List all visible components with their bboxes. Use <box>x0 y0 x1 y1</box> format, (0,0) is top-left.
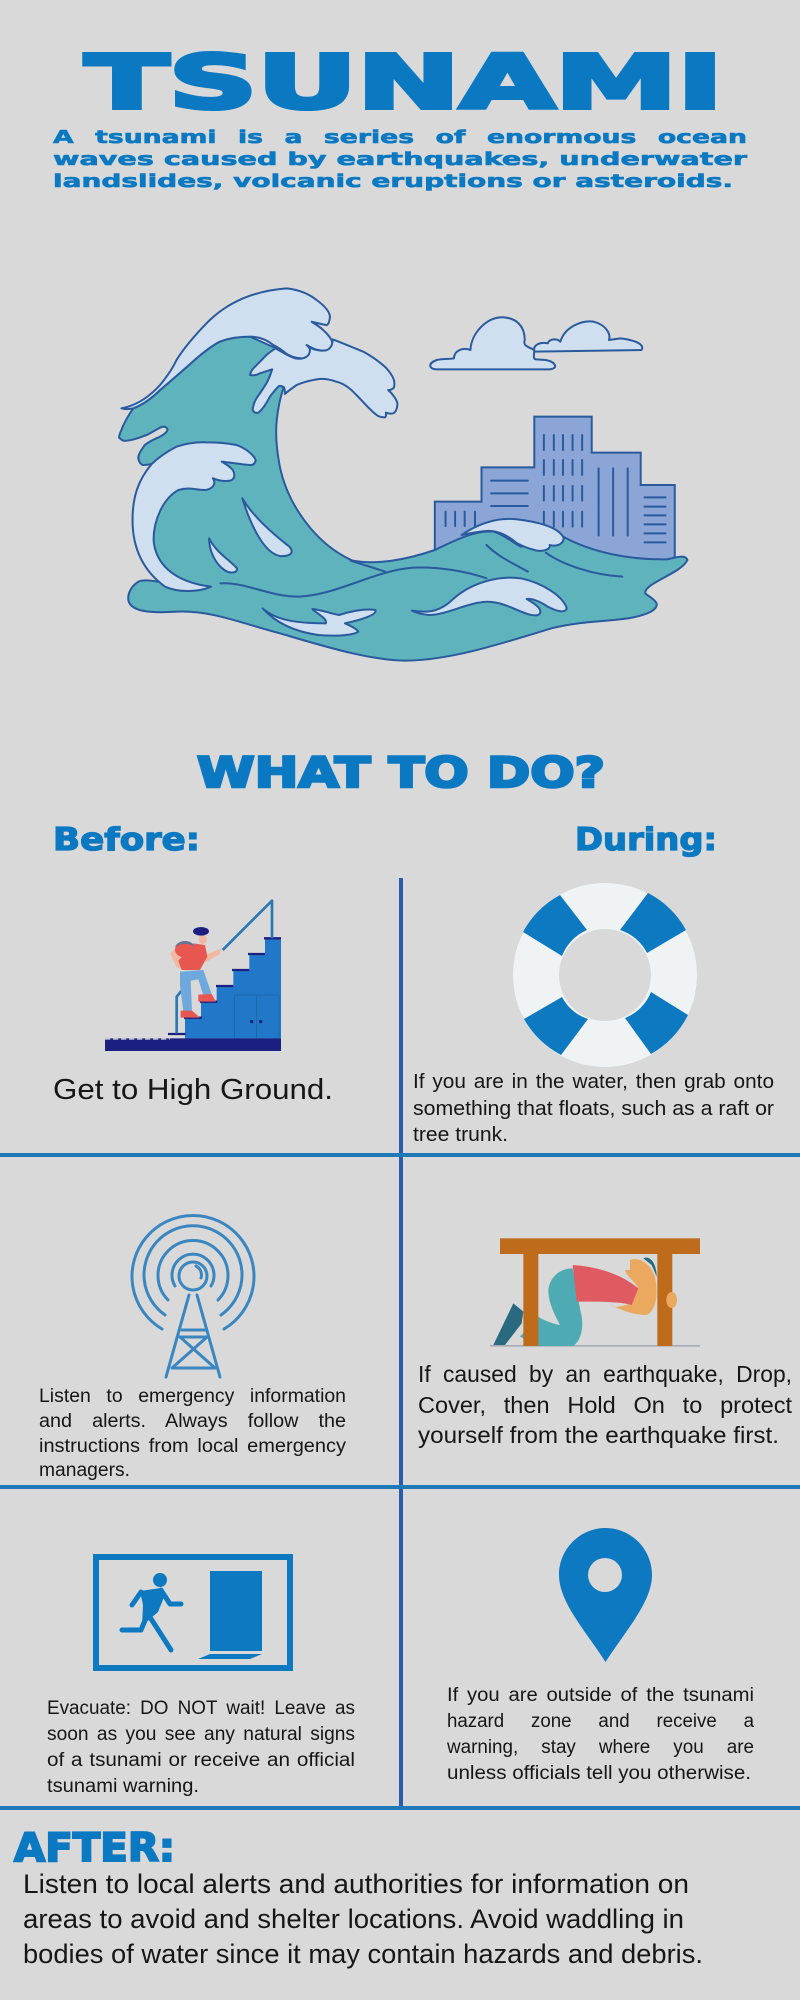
icon: exit sign <box>96 1557 290 1668</box>
text: water advice <box>413 1071 774 1146</box>
illustration: tsunami wave, city and clouds <box>119 288 687 661</box>
text: hazard zone advice: If you are outside of the tsunami <box>447 1685 754 1706</box>
text: after advice: Listen to local alerts and authorities for information on <box>23 1869 689 1899</box>
horizontal divider 1 <box>0 1153 800 1157</box>
building windows <box>446 435 666 542</box>
heading: what to do: WHAT TO DO? <box>197 748 605 797</box>
water lines <box>221 545 622 597</box>
text: hazard zone advice: unless officials tell you otherwise. <box>447 1763 751 1784</box>
text: earthquake advice: yourself from the earthquake first. <box>418 1422 779 1448</box>
text: get to high ground: Get to High Ground. <box>53 1074 333 1106</box>
text: evacuate: of a tsunami or receive an official <box>47 1750 355 1771</box>
text: evacuate <box>47 1698 355 1797</box>
text: after advice: bodies of water since it may contain hazards and debris. <box>23 1939 703 1969</box>
cloud back <box>534 321 642 352</box>
text: emergency information: Listen to emergency information <box>39 1386 346 1407</box>
city buildings <box>435 417 675 563</box>
text: after advice: areas to avoid and shelter locations. Avoid waddling in <box>23 1904 684 1934</box>
text: water advice: tree trunk. <box>413 1124 508 1146</box>
icon: location pin <box>559 1528 652 1662</box>
text: emergency information: and alerts. Always follow the <box>39 1411 346 1432</box>
text: evacuate: soon as you see any natural signs <box>47 1724 355 1745</box>
heading: during: During: <box>575 822 717 858</box>
right foreground foam <box>412 578 567 615</box>
intro text block <box>53 128 748 192</box>
text: water advice: something that floats, such as a raft or <box>413 1098 774 1120</box>
cloud front <box>430 317 555 369</box>
title: TSUNAMI <box>85 40 723 126</box>
foam droplets <box>209 498 292 573</box>
panel: during, hold onto floating object <box>413 883 774 1146</box>
panel: during, drop cover hold on <box>418 1238 793 1448</box>
text: earthquake advice: If caused by an earthquake, Drop, <box>418 1361 792 1387</box>
icon: person under table <box>490 1238 700 1347</box>
icon: life ring <box>513 883 697 1067</box>
text: emergency information: managers. <box>39 1460 130 1481</box>
text: hazard zone advice <box>446 1685 754 1784</box>
panel: before, evacuate <box>47 1557 355 1797</box>
heading: after: AFTER: <box>14 1826 175 1871</box>
text: after advice <box>23 1869 703 1969</box>
heading: before: Before: <box>53 822 200 858</box>
icon: radio tower <box>132 1215 254 1377</box>
text: water advice: If you are in the water, then grab onto <box>413 1071 774 1093</box>
intro text block: waves caused by earthquakes, underwater <box>53 150 748 170</box>
panel: during, stay outside hazard zone <box>446 1528 754 1784</box>
text: earthquake advice: Cover, then Hold On to protect <box>418 1392 793 1418</box>
icon: person climbing stairs <box>105 901 281 1051</box>
text: emergency information <box>39 1386 347 1481</box>
forward foam crest <box>250 339 397 417</box>
lower foam crest <box>133 442 256 591</box>
panel: before, high ground <box>53 901 333 1106</box>
left foreground foam <box>263 608 376 636</box>
intro text block: A tsunami is a series of enormous ocean <box>53 128 747 148</box>
horizontal divider 2 <box>0 1485 800 1489</box>
intro text block: landslides, volcanic eruptions or asteroids. <box>53 172 733 192</box>
small wave foam <box>462 519 564 551</box>
text: hazard zone advice: warning, stay where you are <box>446 1737 754 1758</box>
vertical divider <box>399 878 403 1809</box>
upper foam crest <box>121 288 333 409</box>
text: earthquake advice <box>418 1361 793 1448</box>
wave body <box>119 337 687 661</box>
text: evacuate: tsunami warning. <box>47 1776 199 1797</box>
horizontal divider 3 <box>0 1806 800 1810</box>
text: hazard zone advice: hazard zone and receive a <box>447 1711 754 1732</box>
panel: before, emergency information <box>39 1215 347 1481</box>
text: evacuate: Evacuate: DO NOT wait! Leave as <box>47 1698 355 1719</box>
text: emergency information: instructions from local emergency <box>39 1436 347 1457</box>
